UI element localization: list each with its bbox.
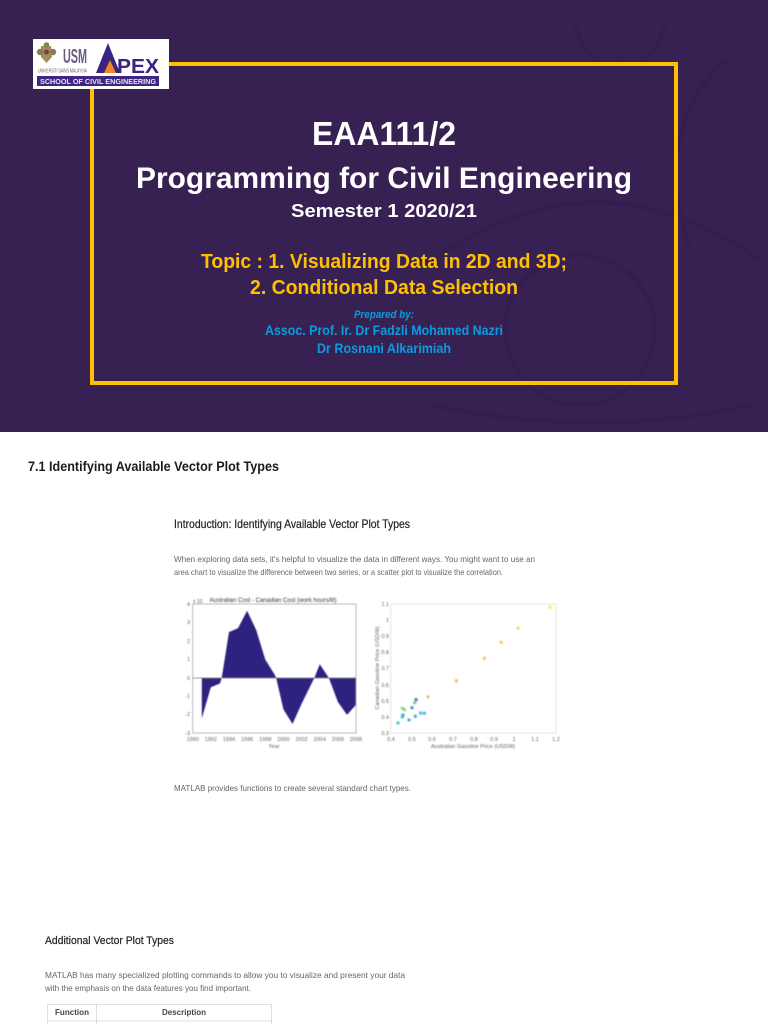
x axis labels: Year — [268, 744, 280, 750]
y axis labels: 4 — [187, 602, 190, 608]
chart: area chart of cost difference: x 10 — [193, 599, 203, 605]
y axis labels — [185, 602, 190, 737]
y axis labels — [381, 602, 389, 737]
topic: line one: Topic : 1. Visualizing Data in 2D and 3D; — [201, 251, 567, 273]
title: course name: Programming for Civil Engineering — [136, 162, 632, 195]
x axis labels: 0.8 — [470, 737, 478, 743]
heading: section 7.1: 7.1 Identifying Available Vector Plot Types — [28, 459, 279, 474]
x axis labels: 1 — [512, 737, 516, 743]
table header: description: Description — [162, 1008, 206, 1017]
plot frame — [391, 604, 556, 733]
frame: yellow border — [92, 64, 676, 383]
text block: additional plots paragraph: MATLAB has many specialized plotting commands to allow you to visualize and present your data — [45, 970, 405, 980]
y axis labels: 1 — [187, 657, 190, 663]
x axis labels: 0.5 — [408, 737, 416, 743]
chart: area chart of cost difference — [185, 597, 362, 750]
y axis labels: 0.6 — [381, 683, 389, 689]
x axis labels: 1994 — [223, 737, 235, 743]
heading: additional vector plot types: Additional Vector Plot Types — [45, 935, 174, 947]
logo banner: school name: SCHOOL OF CIVIL ENGINEERING — [40, 77, 156, 86]
x axis labels: 1998 — [259, 737, 271, 743]
x axis labels: 0.4 — [387, 737, 395, 743]
heading: introduction: Introduction: Identifying Available Vector Plot Types — [174, 517, 410, 531]
chart: gasoline price scatter plot — [375, 602, 560, 750]
x axis labels: 0.7 — [449, 737, 457, 743]
x axis labels: 1.1 — [531, 737, 539, 743]
subtitle: semester: Semester 1 2020/21 — [291, 201, 477, 221]
author: second: Dr Rosnani Alkarimiah — [317, 340, 451, 356]
logo text: USM: USM — [63, 46, 87, 68]
x axis labels: 2002 — [295, 737, 308, 743]
x axis labels: 1990 — [187, 737, 199, 743]
logo text: APEX: PEX — [117, 56, 160, 78]
logo text: university name: UNIVERSITI SAINS MALAYSIA — [38, 68, 87, 74]
x axis labels: 2006 — [332, 737, 344, 743]
icon: apex triangle — [96, 43, 120, 73]
x axis labels — [375, 626, 560, 750]
logo: USM APEX School of Civil Engineering — [33, 39, 169, 89]
y axis labels: 0.3 — [381, 731, 389, 737]
y axis labels: 0.4 — [381, 715, 389, 721]
icon: apex orange accent — [104, 60, 116, 73]
panel: title slide — [0, 0, 768, 432]
text block: chart types note: MATLAB provides functions to create several standard chart types. — [174, 783, 411, 793]
y axis labels: 0.9 — [381, 634, 389, 640]
credit label: Prepared by: — [354, 309, 414, 321]
y axis labels: 3 — [187, 620, 190, 626]
y axis labels: 0 — [187, 676, 190, 682]
y axis labels: -1 — [185, 694, 190, 700]
x axis labels: 0.6 — [428, 737, 436, 743]
y axis labels: -3 — [185, 731, 190, 737]
x axis labels: 2000 — [277, 737, 290, 743]
chart title: Australian Cost - Canadian Cost (work hours/lit) — [210, 597, 336, 604]
x axis labels: 1996 — [241, 737, 253, 743]
area series — [202, 611, 356, 724]
text block: introduction paragraph — [174, 554, 535, 577]
text block: introduction paragraph: area chart to visualize the difference between two series, or a scatter plot to visualize the correlation. — [174, 567, 503, 577]
icon: university crest — [37, 42, 56, 63]
y axis labels: -2 — [185, 712, 190, 718]
x axis labels — [187, 737, 362, 750]
y axis labels: 0.5 — [381, 699, 389, 705]
text block: additional plots paragraph — [44, 970, 405, 993]
table: function and description — [48, 1004, 272, 1024]
x axis labels: 1992 — [205, 737, 217, 743]
author: first: Assoc. Prof. Ir. Dr Fadzli Mohamed Nazri — [265, 322, 503, 338]
topic: line two: 2. Conditional Data Selection — [250, 277, 518, 299]
title: course code: EAA111/2 — [312, 115, 456, 152]
y axis labels: 0.7 — [381, 666, 389, 672]
y axis labels: 1 — [386, 618, 389, 624]
y axis labels: 0.8 — [381, 650, 389, 656]
y axis labels: 1.1 — [381, 602, 389, 608]
y axis labels: 2 — [187, 639, 190, 645]
text block: additional plots paragraph: with the emphasis on the data features you find important. — [44, 983, 251, 993]
x axis labels: 2008 — [350, 737, 362, 743]
x axis labels: Australian Gasoline Price (USD/lit) — [431, 744, 515, 750]
text block: introduction paragraph: When exploring data sets, it's helpful to visualize the data in different ways. You might want to use an — [174, 554, 535, 564]
x axis labels: Canadian Gasoline Price (USD/lit) — [375, 626, 381, 710]
table header: function: Function — [55, 1008, 89, 1017]
x axis labels: 0.9 — [490, 737, 498, 743]
plot frame — [193, 604, 356, 733]
x axis labels: 1.2 — [552, 737, 560, 743]
x axis labels: 2004 — [314, 737, 326, 743]
scatter points — [396, 606, 552, 724]
